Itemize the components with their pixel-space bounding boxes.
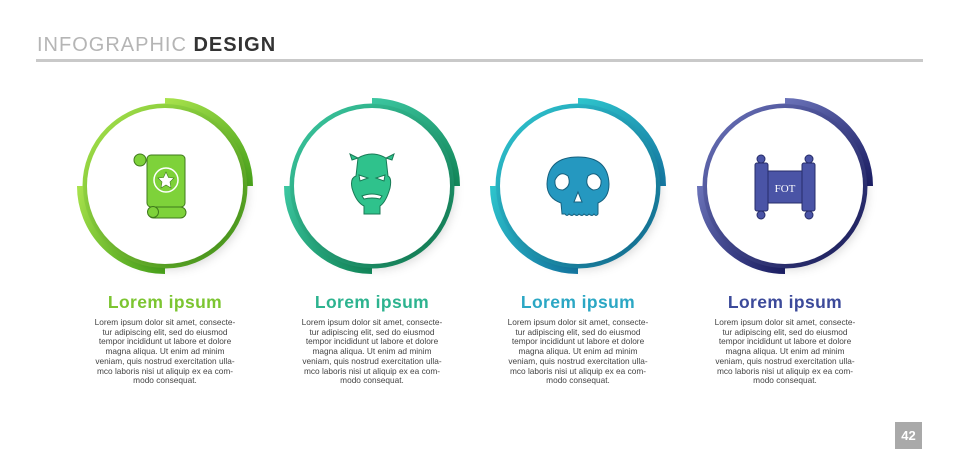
text block 3: Lorem ipsum [521,292,635,312]
icon: torah scroll [755,155,815,219]
circle 1 [80,101,250,271]
text block 3: veniam, quis nostrud exercitation ulla- [508,356,648,366]
text block 1: Lorem ipsum dolor sit amet, consecte- [95,317,235,327]
text block 2: magna aliqua. Ut enim ad minim [312,346,431,356]
text block 1: mco laboris nisi ut aliquip ex ea com- [97,366,233,376]
text block 4: modo consequat. [753,375,817,385]
text block 2: Lorem ipsum dolor sit amet, consecte- [302,317,442,327]
text block 2: mco laboris nisi ut aliquip ex ea com- [304,366,440,376]
title: INFOGRAPHIC DESIGN [37,34,276,56]
text block 2: veniam, quis nostrud exercitation ulla- [302,356,442,366]
text block 1: modo consequat. [133,375,197,385]
circle 4 [700,101,870,271]
icon: torah scroll: FOT [775,183,796,195]
text block 4: Lorem ipsum [728,292,842,312]
text block 1: tur adipiscing elit, sed do eiusmod [102,327,227,337]
page number [895,422,922,449]
text block 3: mco laboris nisi ut aliquip ex ea com- [510,366,646,376]
circle 3 [493,101,663,271]
text block 2: modo consequat. [340,375,404,385]
text block 1: Lorem ipsum [108,292,222,312]
text block 2: Lorem ipsum [315,292,429,312]
page number: 42 [901,428,916,443]
text block 3 [508,292,648,385]
text block 3: Lorem ipsum dolor sit amet, consecte- [508,317,648,327]
circle 2 [287,101,457,271]
text block 4: mco laboris nisi ut aliquip ex ea com- [717,366,853,376]
text block 4: veniam, quis nostrud exercitation ulla- [715,356,855,366]
text block 4: tur adipiscing elit, sed do eiusmod [722,327,847,337]
text block 3: tur adipiscing elit, sed do eiusmod [516,327,640,337]
text block 3: modo consequat. [546,375,610,385]
text block 4: Lorem ipsum dolor sit amet, consecte- [715,317,855,327]
icon: skull [547,157,609,216]
text block 1: veniam, quis nostrud exercitation ulla- [95,356,235,366]
text block 3: tempor incididunt ut labore et dolore [512,336,644,346]
text block 1: tempor incididunt ut labore et dolore [99,336,231,346]
text block 4: tempor incididunt ut labore et dolore [719,336,851,346]
text block 4 [715,292,855,385]
icon: ogre head [350,154,394,214]
text block 1: magna aliqua. Ut enim ad minim [106,346,224,356]
text block 4: magna aliqua. Ut enim ad minim [726,346,844,356]
text block 2: tur adipiscing elit, sed do eiusmod [310,327,434,337]
circles graphic [77,98,873,274]
icon: scroll with star [134,154,186,218]
text block 3: magna aliqua. Ut enim ad minim [518,346,637,356]
text block 2 [302,292,442,385]
text block 2: tempor incididunt ut labore et dolore [306,336,438,346]
text block 1 [95,292,235,385]
